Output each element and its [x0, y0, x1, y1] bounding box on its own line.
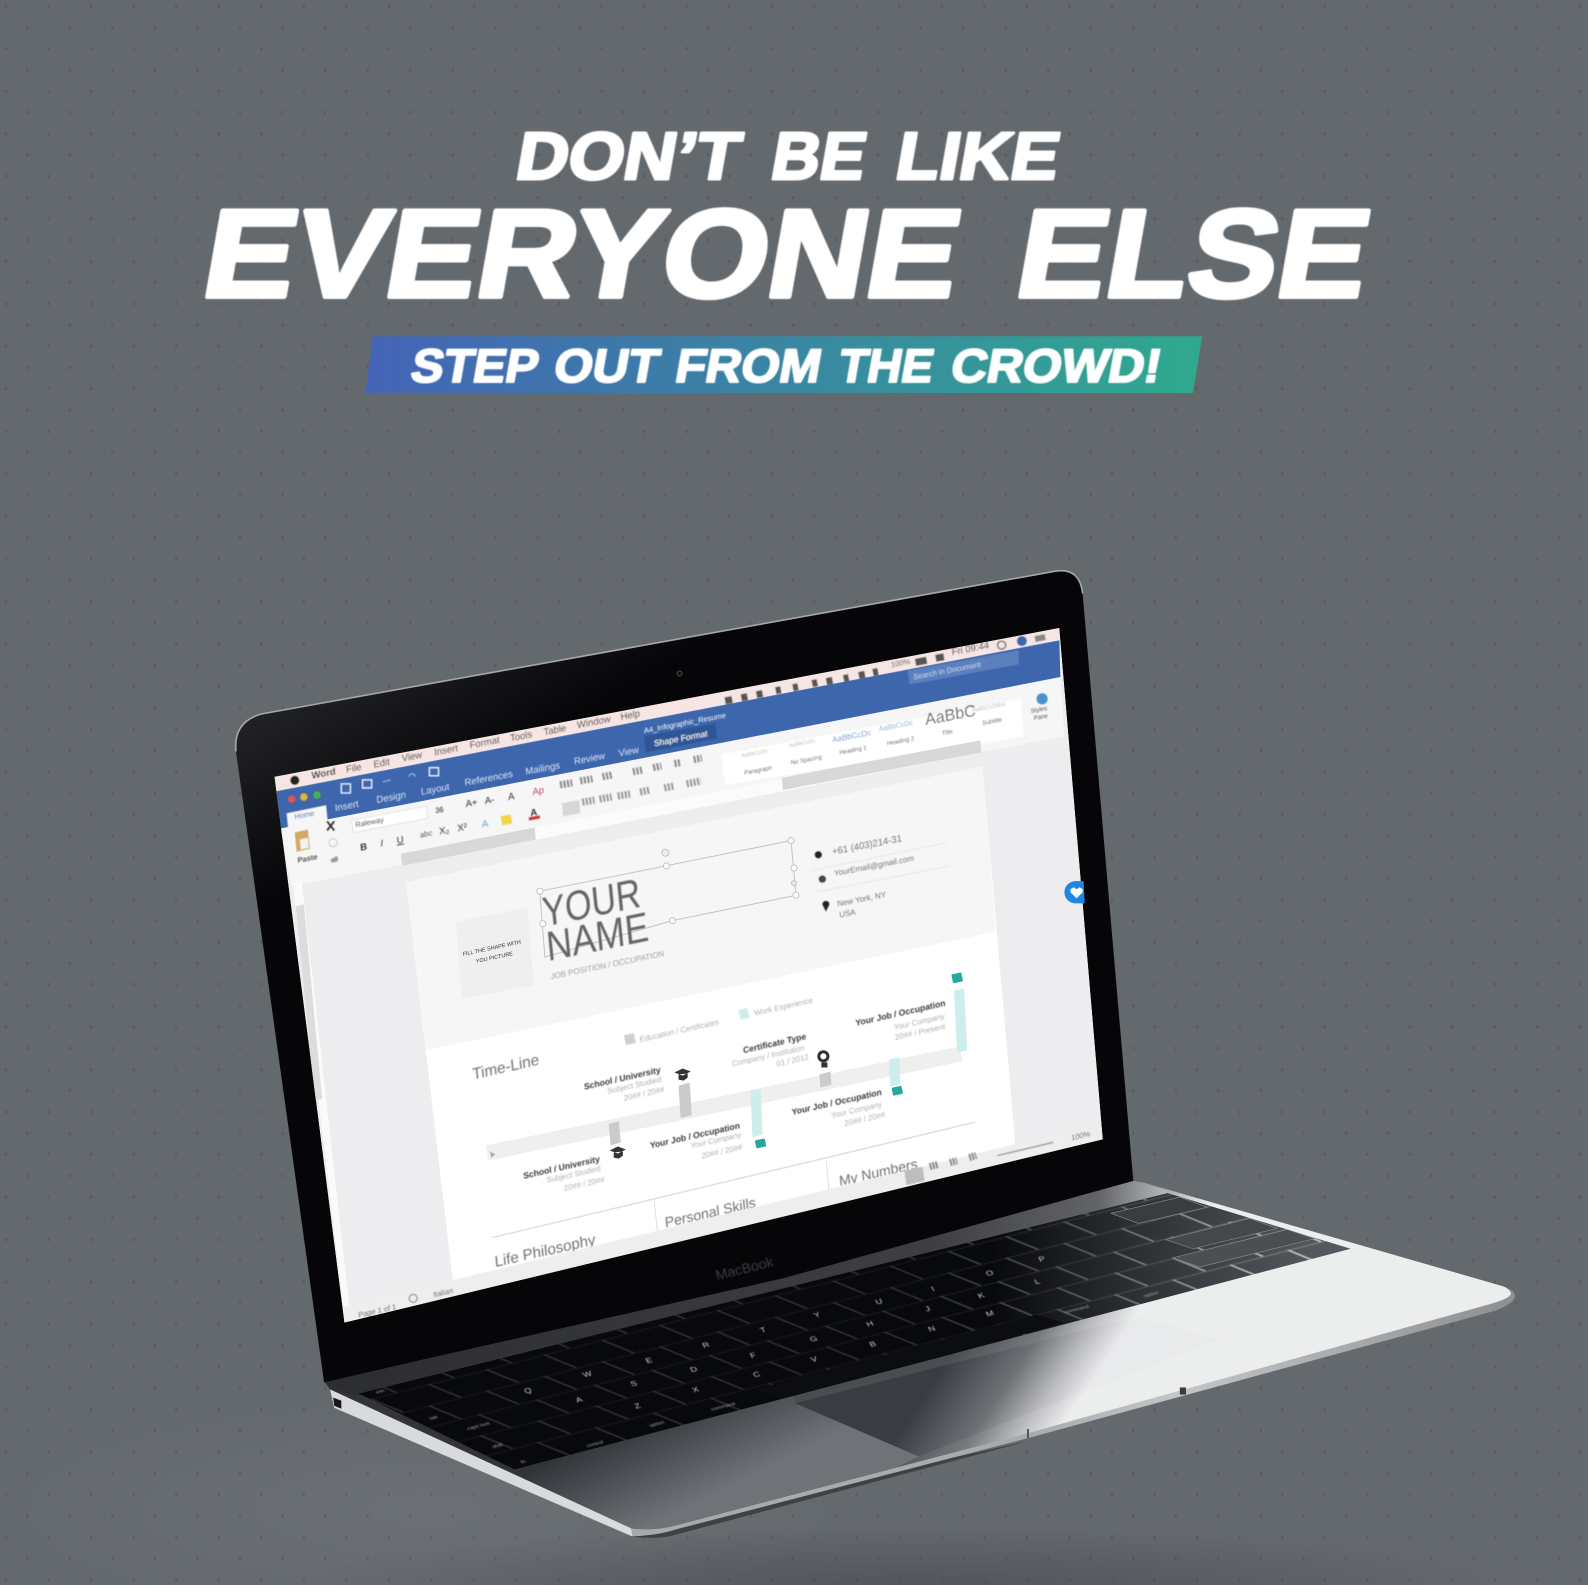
ribbon contents: Review — [574, 751, 606, 768]
timeline — [472, 972, 967, 1193]
toolbar contents: A — [530, 807, 538, 819]
ribbon contents: Mailings — [525, 760, 561, 778]
ribbon contents: View — [618, 745, 639, 760]
menu bar: Fri 09:44 — [951, 640, 990, 658]
hinge band — [324, 1181, 1173, 1396]
section headings — [494, 1156, 918, 1271]
key labels: Q — [523, 1386, 534, 1395]
status bar: Italian — [433, 1286, 453, 1299]
timeline text: 20## / Present — [895, 1022, 946, 1042]
banner: step out from the crowd: FROM — [672, 340, 826, 393]
key labels: W — [581, 1370, 594, 1379]
style gallery: AaBbC — [924, 702, 977, 729]
menu bar: Insert — [434, 743, 459, 759]
banner: step out from the crowd: OUT — [550, 340, 664, 393]
key labels: T — [759, 1326, 768, 1334]
timeline text: School / University — [584, 1065, 661, 1092]
key labels: E — [644, 1356, 654, 1365]
contact details: YourEmail@gmail.com — [834, 854, 915, 878]
timeline text: 20## / 20## — [844, 1110, 886, 1128]
ribbon contents: References — [464, 769, 514, 789]
contact details: New York, NY — [837, 890, 887, 908]
toolbar contents: 36 — [435, 805, 444, 815]
style gallery: AaBbCcDc — [832, 728, 871, 744]
ribbon contents — [287, 650, 1019, 835]
key labels: C — [751, 1370, 762, 1379]
status bar: Page 1 of 1 — [358, 1302, 397, 1320]
timeline text: Your Company — [690, 1130, 742, 1150]
timeline text: Certificate Type — [743, 1031, 807, 1055]
style gallery: AaBbCcDc — [789, 738, 816, 749]
style gallery: Paragraph — [744, 765, 772, 777]
key labels: O — [984, 1269, 996, 1278]
key labels: option — [648, 1420, 666, 1429]
menu bar: Help — [620, 708, 641, 723]
laptop — [236, 571, 1515, 1538]
name text — [542, 880, 664, 980]
toolbar contents: Raleway — [355, 815, 384, 829]
legend — [624, 996, 814, 1045]
timeline text: Your Job / Occupation — [649, 1120, 740, 1150]
status bar: 100% — [1071, 1129, 1091, 1142]
milestone icons — [610, 972, 963, 1159]
style gallery: Heading 1 — [839, 745, 868, 757]
style gallery: Pane — [1034, 713, 1049, 722]
key labels: command — [710, 1402, 737, 1412]
toolbar contents: U — [396, 834, 404, 847]
section headings: My Numbers — [838, 1156, 918, 1190]
toolbar contents: I — [380, 838, 384, 850]
timeline text — [523, 998, 946, 1193]
toolbar contents: A+ — [465, 797, 478, 810]
legend: Work Experience — [754, 996, 814, 1018]
large keys — [1111, 1197, 1315, 1267]
menu bar — [274, 628, 1059, 791]
name text: JOB POSITION / OCCUPATION — [550, 949, 665, 981]
heading: don't be like: BE — [766, 119, 872, 194]
menu bar: File — [346, 762, 362, 776]
heading: everyone else — [194, 184, 1381, 324]
timeline text: School / University — [523, 1154, 600, 1181]
title: headline block — [194, 119, 1381, 324]
work bars — [750, 988, 967, 1137]
macbook wordmark: MacBook — [714, 1254, 776, 1284]
camera — [677, 671, 682, 676]
timeline heading: Time-Line — [472, 1052, 540, 1084]
banner: step out from the crowd: THE — [835, 340, 938, 393]
ribbon contents: Shape Format — [654, 728, 709, 748]
timeline text: Your Job / Occupation — [855, 998, 946, 1028]
home tab — [286, 804, 328, 828]
ribbon contents: Layout — [421, 782, 450, 798]
key labels: A — [574, 1396, 585, 1404]
style gallery: No Spacing — [791, 755, 822, 767]
contact details: USA — [839, 907, 857, 920]
paste button — [295, 829, 310, 852]
toolbar contents — [295, 693, 1049, 865]
style gallery: Title — [942, 729, 954, 737]
section headings: Life Philosophy — [494, 1231, 597, 1271]
timeline text: Company / Institution — [732, 1043, 805, 1068]
menu bar: Tools — [510, 729, 533, 744]
key labels: R — [701, 1341, 711, 1350]
key labels: H — [865, 1320, 875, 1328]
heading: don't be like: DON’T — [511, 119, 747, 194]
key labels: V — [809, 1355, 820, 1364]
timeline text: 20## / 20## — [701, 1142, 743, 1161]
menu bar: Format — [469, 735, 500, 751]
clipboard icons — [327, 821, 338, 863]
timeline text: Your Company — [831, 1100, 882, 1120]
key labels: L — [1033, 1277, 1042, 1286]
key labels — [375, 1255, 1160, 1465]
key labels: M — [984, 1309, 996, 1318]
style gallery: Heading 2 — [887, 736, 915, 747]
contact details: +61 (403)214-31 — [832, 833, 902, 858]
ribbon contents: Search in Document — [913, 660, 982, 682]
style gallery: Subtitle — [982, 717, 1003, 727]
key labels: J — [924, 1305, 932, 1313]
trackpad — [795, 1317, 1217, 1456]
base left silver edge — [330, 1390, 632, 1536]
ribbon contents: Design — [376, 790, 406, 806]
style gallery: Styles — [1031, 706, 1047, 715]
search box — [907, 650, 1019, 685]
resume page — [406, 767, 1016, 1288]
contact details — [810, 833, 950, 920]
key labels: tab — [429, 1415, 439, 1421]
style gallery: AaBbCcDc — [879, 719, 914, 733]
toolbar contents: abc — [420, 828, 433, 840]
timeline text: 20## / 20## — [563, 1175, 606, 1193]
document title: A4_Infographic_Resume — [643, 711, 726, 735]
key labels: shift — [491, 1442, 505, 1450]
key labels: caps lock — [466, 1421, 492, 1432]
key labels: D — [689, 1365, 699, 1374]
menu bar: Table — [543, 723, 567, 738]
education bars — [609, 1072, 831, 1145]
toolbar contents: A — [508, 791, 516, 803]
resume header band — [406, 767, 996, 1050]
heading: don't be like — [511, 119, 1066, 194]
toolbar contents: X₂ — [439, 825, 450, 838]
key labels: I — [930, 1285, 936, 1293]
key labels: S — [629, 1379, 639, 1388]
word toolbar — [281, 677, 1064, 886]
toolbar contents: X² — [457, 822, 468, 834]
ribbon — [276, 640, 1060, 828]
key labels: Y — [812, 1311, 823, 1319]
timeline text: Your Job / Occupation — [791, 1087, 882, 1117]
laptop base — [324, 1180, 1516, 1538]
banner: step out from the crowd: STEP — [407, 340, 543, 393]
banner: step out from the crowd: CROWD! — [947, 340, 1166, 393]
usb port — [333, 1398, 341, 1409]
key labels: fn — [520, 1459, 527, 1465]
legend: Education / Certificates — [639, 1017, 719, 1044]
key labels: B — [868, 1340, 878, 1349]
style gallery: AaBbCcDdEe — [972, 702, 1006, 714]
heading: everyone else: ELSE — [1007, 184, 1381, 324]
base silhouette edge — [324, 1181, 1515, 1536]
deck left shade — [330, 1337, 919, 1529]
toolbar contents: Paste — [297, 852, 318, 865]
timeline text: 01 / 2012 — [776, 1052, 809, 1068]
font box — [351, 806, 427, 833]
menu bar: 100% — [891, 657, 911, 669]
key labels: Z — [633, 1402, 642, 1410]
workspace background — [274, 628, 1103, 1323]
timeline track — [486, 1046, 962, 1161]
laptop lid — [236, 571, 1133, 1382]
section headings: Personal Skills — [664, 1195, 756, 1231]
key labels: control — [586, 1440, 604, 1449]
key labels: esc — [375, 1388, 387, 1395]
key labels: option — [1143, 1290, 1160, 1299]
ribbon contents: Insert — [335, 799, 359, 814]
photo placeholder: YOU PICTURE — [476, 951, 514, 965]
style gallery: AaBbCcDc — [741, 748, 768, 760]
menu bar: Word — [311, 766, 336, 782]
ruler — [401, 740, 981, 866]
toolbar contents: Ap — [532, 785, 545, 798]
heading: everyone else: EVERYONE — [194, 184, 972, 324]
timeline text: Subject Studied — [546, 1164, 601, 1185]
icon: blue helper badge — [1064, 881, 1085, 903]
menu bar: View — [401, 750, 423, 765]
toolbar contents: A- — [484, 794, 495, 807]
timeline text: Your Company — [894, 1012, 945, 1032]
toolbar contents: B — [360, 841, 368, 854]
name text: YOUR — [540, 869, 643, 936]
deck surface — [324, 1181, 1511, 1529]
keyboard — [359, 1193, 1351, 1470]
heading: don't be like: LIKE — [891, 119, 1066, 194]
key labels: N — [927, 1325, 937, 1333]
shape format tab — [644, 723, 717, 752]
name selection frame — [537, 838, 799, 957]
space bar — [755, 1315, 1063, 1401]
key gaps — [370, 1194, 1327, 1456]
timeline text: 20## / 20## — [623, 1085, 665, 1103]
key labels: F — [748, 1351, 758, 1360]
name text: NAME — [544, 902, 651, 970]
vertical ruler — [293, 881, 349, 1307]
banner: step out from the crowd — [366, 336, 1202, 393]
key labels: command — [1064, 1304, 1090, 1315]
style gallery — [721, 693, 1049, 785]
section dividers — [492, 1122, 975, 1241]
key labels: U — [874, 1297, 884, 1306]
menu bar: Edit — [373, 757, 391, 771]
status bar — [344, 1126, 1103, 1323]
key labels: K — [976, 1291, 987, 1300]
key labels: X — [691, 1386, 701, 1394]
traffic lights — [288, 791, 321, 803]
timeline text: Subject Studied — [607, 1075, 662, 1096]
key labels: P — [1037, 1255, 1047, 1263]
screen: word document — [274, 628, 1103, 1323]
status icons — [725, 671, 878, 701]
front notches — [1027, 1387, 1186, 1438]
photo placeholder: FILL THE SHAPE WITH — [462, 940, 521, 958]
toolbar contents: A — [481, 818, 489, 830]
ribbon contents: Home — [294, 809, 315, 821]
menu bar: Window — [577, 714, 611, 731]
key labels: G — [808, 1335, 819, 1343]
base underside shadow — [630, 1441, 1028, 1538]
